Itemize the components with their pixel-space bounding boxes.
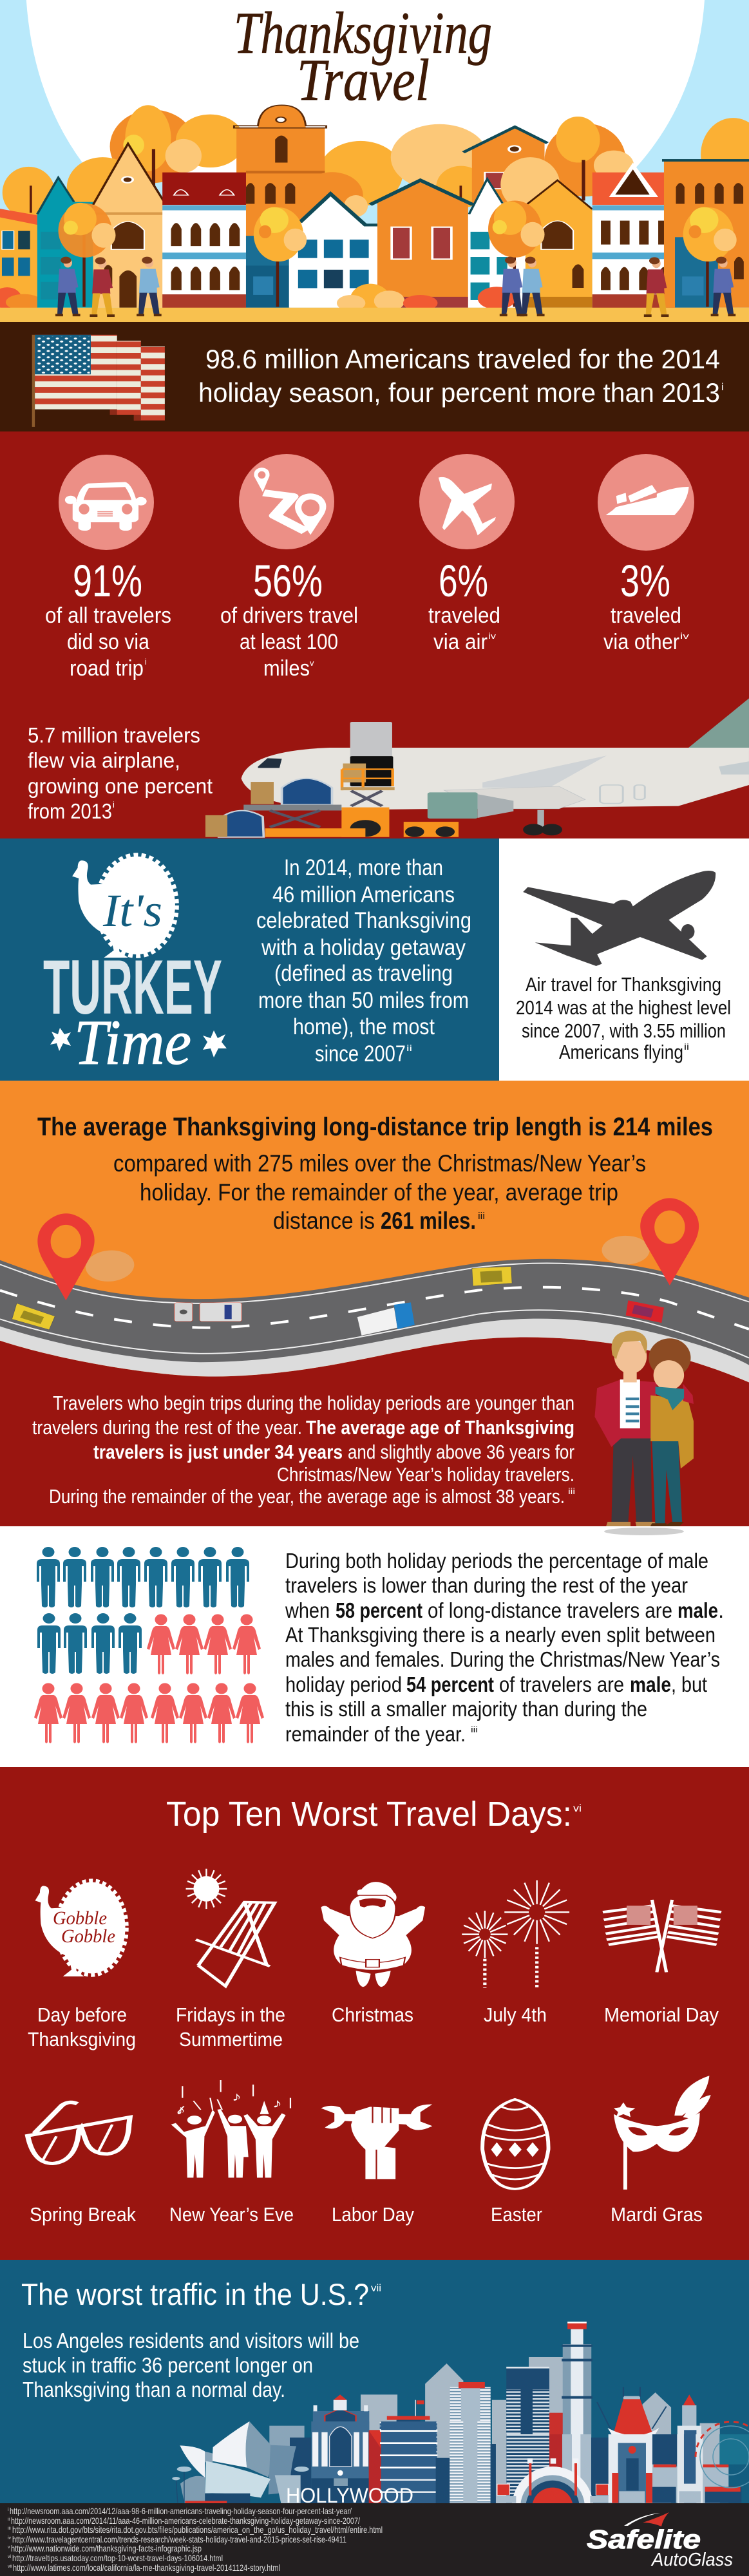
striped tower <box>450 2387 491 2510</box>
headline text <box>198 344 724 408</box>
text: gender split: , but <box>671 1672 707 1696</box>
text: Los Angeles: stuck in traffic 36 percent longer on <box>23 2353 313 2377</box>
text: gender split: . <box>718 1598 724 1622</box>
text: average age: travelers during the rest of the year. <box>32 1416 302 1439</box>
upper gable building <box>463 127 560 211</box>
observatory, theatre and city hall base <box>497 2434 749 2548</box>
text: gender split: this is still a smaller majority than during the <box>285 1697 647 1721</box>
sources: iv <box>8 2536 12 2541</box>
labels: row two: Easter <box>491 2203 542 2226</box>
labels: row one: Thanksgiving <box>28 2028 136 2050</box>
stat: 91%: 91% <box>73 556 142 606</box>
icon: airplane <box>439 477 496 535</box>
text: air travel <box>516 973 731 1063</box>
text: average trip length: distance is <box>273 1208 375 1234</box>
text: average trip length: compared with 275 miles over the Christmas/New Year’s <box>113 1150 646 1177</box>
icon: fireworks <box>462 1880 569 1988</box>
sources: http://traveltips.usatoday.com/top-10-worst-travel-days-106014.html <box>12 2553 223 2563</box>
icon: fist and wrench <box>321 2105 432 2179</box>
text: HOLLYWOOD sign: HOLLYWOOD <box>286 2484 413 2507</box>
truck: blue <box>357 1302 415 1336</box>
house: orange <box>370 180 473 308</box>
title: Thanksgiving <box>234 0 492 66</box>
car: yellow taxi left <box>12 1303 55 1330</box>
text: average trip length <box>37 1113 713 1234</box>
text: average age: and slightly above 36 years for <box>348 1441 574 1463</box>
icon: crossed flags <box>603 1900 721 1972</box>
back trees <box>3 105 749 218</box>
orange tower building <box>234 105 327 238</box>
text: average trip length: 261 miles. <box>381 1208 476 1234</box>
office block <box>380 2422 437 2511</box>
icon: party people: ♪ <box>232 2090 242 2104</box>
panel: gender split <box>0 1526 749 1767</box>
city hall <box>683 2394 696 2405</box>
text: 5.7 million flew <box>28 723 213 823</box>
labels: row one: Memorial Day <box>604 2003 719 2026</box>
church facade and striped block <box>311 2421 496 2504</box>
icon: sunglasses <box>28 2102 130 2164</box>
sources: http://www.nationwide.com/thanksgiving-facts-infographic.jsp <box>11 2543 202 2553</box>
car: yellow taxi right <box>472 1267 512 1286</box>
text: gender split <box>285 1549 724 1746</box>
building: far right <box>662 159 749 308</box>
text: average age: The average age of Thanksgiving <box>306 1416 574 1439</box>
logo: Safelite AutoGlass: Safelite <box>587 2524 701 2554</box>
ground <box>0 308 749 322</box>
text: gender split: 54 percent <box>406 1672 494 1696</box>
house: white with orange roof <box>593 163 675 308</box>
truck: gray <box>175 1303 242 1321</box>
text: 5.7 million flew: i <box>113 800 115 810</box>
labels: row two: Labor Day <box>332 2203 414 2226</box>
icon: party people: ♪ <box>176 2103 186 2117</box>
illustration: airplane being loaded <box>205 698 749 837</box>
stat: 6%: via air <box>433 630 488 654</box>
Disney concert hall <box>172 2421 380 2504</box>
icon: party people <box>171 2080 290 2178</box>
text: gender split: 58 percent <box>336 1598 422 1622</box>
house: white with red roof <box>162 173 246 308</box>
stat: 3% <box>603 556 690 654</box>
sources: v <box>8 2545 10 2550</box>
tall navy tower <box>506 2368 549 2510</box>
text: average trip length: iii <box>478 1211 485 1222</box>
panel: air travel <box>499 838 749 1081</box>
map pin right <box>594 1198 699 1285</box>
labels: row one: Christmas <box>332 2003 413 2026</box>
icon: easter egg <box>482 2099 549 2189</box>
text: air travel: Americans flying <box>559 1041 683 1063</box>
stat: 3%: iv <box>680 631 690 641</box>
stat: 56%: of drivers travel <box>220 603 358 628</box>
illustration: winding road <box>0 1198 749 1535</box>
footer: sources and logo <box>0 2503 749 2576</box>
text: average age: During the remainder of the year, the average age is almost 38 years. <box>49 1485 565 1508</box>
text: gender split: male <box>678 1598 718 1622</box>
text: gender split: iii <box>471 1725 478 1734</box>
headline text: 98.6 million Americans traveled for the 2014 <box>205 344 720 374</box>
stat: 91%: i <box>145 657 147 667</box>
labels: row one: Fridays in the <box>176 2003 285 2026</box>
stat: 3%: 3% <box>620 556 670 606</box>
car: red <box>626 1300 664 1323</box>
text: 46 million: since 2007 <box>315 1041 406 1066</box>
couple shadow <box>604 1528 684 1535</box>
sources: iii <box>8 2526 11 2531</box>
hero: autumn town scene <box>0 0 749 322</box>
stat: 91%: did so via <box>67 630 149 654</box>
text: 46 million: (defined as traveling <box>274 961 453 986</box>
text: Time: Time <box>74 1007 191 1078</box>
panel: top ten worst travel days <box>0 1767 749 2260</box>
icon: gobble turkey <box>35 1881 126 1976</box>
sources: ii <box>8 2517 10 2522</box>
text: average age <box>32 1392 575 1508</box>
house: yellow <box>526 180 593 308</box>
text: average age: travelers is just under 34 years <box>93 1441 343 1463</box>
text: 5.7 million flew: from 2013 <box>28 799 112 823</box>
library tower <box>563 2344 591 2510</box>
bushes <box>337 284 516 316</box>
headline text: i <box>721 382 724 393</box>
icon: gobble turkey: Gobble <box>53 1908 107 1929</box>
back buildings <box>361 2357 720 2510</box>
icon: plane silhouette <box>523 871 716 966</box>
text: TURKEY: TURKEY <box>43 944 222 1030</box>
stat circles <box>59 454 694 551</box>
map pin left <box>37 1213 142 1300</box>
stat: 3%: traveled <box>611 603 681 628</box>
labels: row two: New Year’s Eve <box>169 2203 294 2226</box>
headline text: holiday season, four percent more than 2013 <box>198 377 720 408</box>
stat: 6%: 6% <box>439 556 488 606</box>
text: 46 million: ii <box>406 1043 412 1053</box>
title <box>234 0 492 113</box>
text: 5.7 million flew: 5.7 million travelers <box>28 723 200 747</box>
panel: worst traffic <box>0 2260 749 2548</box>
sources: vii <box>8 2564 12 2569</box>
heading: The worst traffic in the U.S.? <box>21 2277 369 2311</box>
panel: how travelers traveled <box>0 431 749 838</box>
icon: mardi gras mask <box>614 2076 711 2190</box>
text: 46 million: home), the most <box>293 1014 435 1039</box>
sources: http://newsroom.aaa.com/2014/12/aaa-98-6-million-americans-traveling-holiday-season-four-percent-last-year/ <box>10 2506 352 2516</box>
labels: row two: Spring Break <box>30 2203 136 2226</box>
text: gender split: remainder of the year. <box>285 1722 466 1746</box>
text: gender split: of travelers are <box>499 1672 624 1696</box>
ferris wheel <box>696 2421 749 2488</box>
illustration: LA skyline <box>172 2322 749 2548</box>
icon: American flag <box>32 335 165 427</box>
text: gender split: holiday period <box>285 1672 402 1696</box>
stat: 6%: traveled <box>428 603 500 628</box>
icon: gobble turkey: Gobble <box>61 1926 115 1947</box>
text: 46 million <box>256 855 471 1066</box>
text: average age: Christmas/New Year’s holiday travelers. <box>277 1463 574 1486</box>
text: air travel: ii <box>684 1042 689 1052</box>
text: 46 million: 46 million Americans <box>272 882 455 907</box>
stat: 91%: of all travelers <box>45 603 171 628</box>
text: 5.7 million flew: flew via airplane, <box>28 748 180 772</box>
text: average age: Travelers who begin trips during the holiday periods are younger than <box>53 1392 574 1414</box>
building: blue base <box>246 172 368 308</box>
banner: 98.6 million travelers <box>0 322 749 431</box>
house: narrow white <box>468 179 526 308</box>
house: teal <box>37 176 93 308</box>
text: gender split: travelers is lower than during the rest of the year <box>285 1573 688 1597</box>
panel: it's turkey time <box>0 838 499 1081</box>
text: 46 million: with a holiday getaway <box>261 935 466 960</box>
stat: 6% <box>428 556 500 654</box>
sources <box>8 2506 383 2573</box>
icon: leaves <box>50 1028 227 1057</box>
icon: cruise ship <box>605 485 689 515</box>
icon: sun and deck chair <box>186 1869 274 1986</box>
pictogram: men and women <box>34 1547 264 1743</box>
stat: 56% <box>220 556 358 681</box>
panel: trip length and road <box>0 1081 749 1535</box>
palms <box>176 2465 372 2504</box>
labels: row two <box>30 2203 703 2226</box>
stat: 56%: 56% <box>253 556 323 606</box>
stat: 6%: iv <box>488 631 497 641</box>
heading: Top Ten Worst Travel Days: <box>166 1795 572 1833</box>
labels: row one: Day before <box>37 2003 127 2026</box>
labels: row one: Summertime <box>179 2028 283 2050</box>
sources: http://www.latimes.com/local/california/la-me-thanksgiving-travel-20141124-story.html <box>13 2562 280 2573</box>
text: Los Angeles: Los Angeles residents and visitors will be <box>23 2329 359 2353</box>
logo: Safelite AutoGlass <box>587 2512 733 2570</box>
text: It's: It's <box>102 885 162 936</box>
sources: http://newsroom.aaa.com/2014/11/aaa-46-million-americans-celebrate-thanksgiving-holiday-getaway-since-2007/ <box>11 2515 360 2526</box>
text: gender split: when <box>285 1598 330 1622</box>
house: far left <box>0 209 42 310</box>
text: average trip length: holiday. For the remainder of the year, average trip <box>140 1179 618 1206</box>
title: Travel <box>297 47 430 113</box>
icon: santa <box>321 1882 425 1987</box>
theatre pagoda <box>614 2399 652 2438</box>
labels: row two: Mardi Gras <box>611 2203 703 2226</box>
stat: 91%: road trip <box>70 656 144 681</box>
text: Los Angeles <box>23 2329 359 2401</box>
illustration: couple <box>594 1331 694 1535</box>
sources: http://www.rita.dot.gov/bts/sites/rita.dot.gov.bts/files/publications/america_on_the_go/us_holiday_travel/html/entire.html <box>12 2524 383 2535</box>
sources: http://www.travelagentcentral.com/trends-research/week-stats-holiday-travel-and-2015-prices-set-rise-49411 <box>12 2534 346 2544</box>
logo: Safelite AutoGlass: AutoGlass <box>650 2550 733 2570</box>
stat: 3%: via other <box>603 630 679 654</box>
text: 46 million: In 2014, more than <box>284 855 443 880</box>
icon: party people: ♪ <box>272 2097 282 2110</box>
labels: row one <box>28 2003 719 2050</box>
text: 46 million: more than 50 miles from <box>258 988 469 1013</box>
pedestrians <box>55 257 735 317</box>
foreground trees <box>58 200 737 307</box>
heading: vi <box>573 1803 582 1814</box>
house: cream gabled <box>93 144 164 308</box>
icon: route pin <box>254 468 326 535</box>
sky background <box>0 0 749 322</box>
sources: vi <box>8 2555 12 2559</box>
church <box>313 2411 369 2511</box>
text: gender split: of long-distance travelers are <box>428 1598 672 1622</box>
stat: 56%: at least 100 <box>240 630 338 654</box>
stat: 56%: miles <box>263 656 310 681</box>
text: gender split: male <box>630 1672 671 1696</box>
labels: row one: July 4th <box>484 2003 547 2026</box>
sources: i <box>8 2508 9 2512</box>
icon: car <box>65 482 147 531</box>
text: Los Angeles: Thanksgiving than a normal day. <box>23 2378 285 2401</box>
heading: vii <box>371 2283 381 2294</box>
stat: 56%: v <box>310 658 314 668</box>
white sun glow <box>26 0 705 173</box>
text: 46 million: celebrated Thanksgiving <box>256 908 471 933</box>
house: white with teal roof <box>289 194 385 308</box>
stat: 91% <box>45 556 171 681</box>
icon: turkey <box>72 855 176 958</box>
text: average age: iii <box>568 1486 575 1496</box>
text: 5.7 million flew: growing one percent <box>28 774 213 798</box>
